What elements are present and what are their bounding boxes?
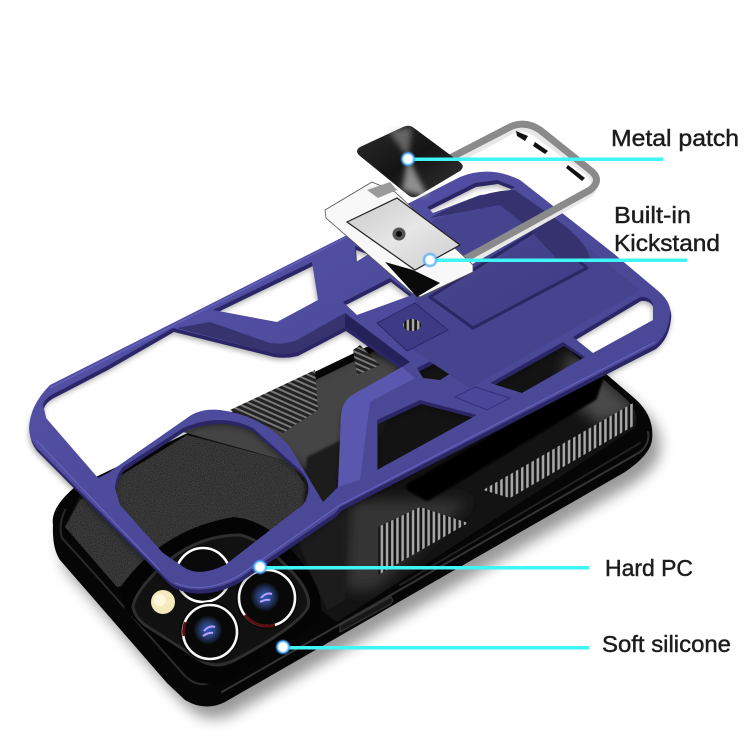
metal ring [445,124,596,275]
callout: hard PC [252,555,693,581]
camera plate [133,535,309,665]
frame edge highlight [36,237,655,588]
diagonal strut shading [345,313,410,367]
gray inner plate [347,198,460,270]
callout: hard PC: Hard PC [605,555,693,581]
callout: metal patch: Metal patch [611,125,739,151]
carbon patch: triangle [378,507,468,575]
back panel [65,290,636,622]
mount arch [430,190,590,262]
pad [377,303,448,351]
kickstand recess [410,377,600,497]
callout: built-in kickstand [422,202,720,268]
carbon patch: upper [230,370,318,433]
base tab [367,182,397,198]
callout: built-in kickstand: Kickstand [614,230,720,256]
frame shadow on case [29,178,670,596]
metal patch [357,126,463,197]
pivot hole [392,228,406,240]
right body panel [405,195,640,388]
side button [340,597,392,632]
cross beam shading [177,313,345,354]
callout: soft silicone: Soft silicone [602,631,731,657]
small inset quad [455,387,510,410]
camera island [120,517,321,684]
built-in kickstand [325,124,596,297]
textured strip right of camera [300,438,345,610]
callout: metal patch [400,125,739,167]
carbon patch: small [353,345,380,375]
callout: soft silicone [275,631,731,657]
frame body [29,172,670,590]
lens right [236,567,298,629]
glossy reflections on back panel [225,350,640,590]
case drop shadow [61,295,660,719]
silver base plate [325,182,473,297]
glossy wedge in camera opening [183,414,300,470]
soft silicone case [52,345,669,727]
lens bottom [180,602,240,662]
lower strut [338,367,415,487]
textured leather area [65,435,312,587]
vent [403,319,421,331]
carbon patch: long [483,403,635,498]
hard PC frame [29,172,671,596]
case body [53,283,652,707]
frame underside [30,176,671,594]
infographic: exploded phone case [26,120,738,727]
camera bump [120,517,321,684]
lens top [174,546,232,604]
flash [151,590,175,614]
callout: built-in kickstand: Built-in [614,202,691,228]
case rim highlights [61,432,648,692]
raised kickstand mount [430,228,587,328]
ring inner notches [516,131,585,181]
black lower plate [385,262,440,297]
